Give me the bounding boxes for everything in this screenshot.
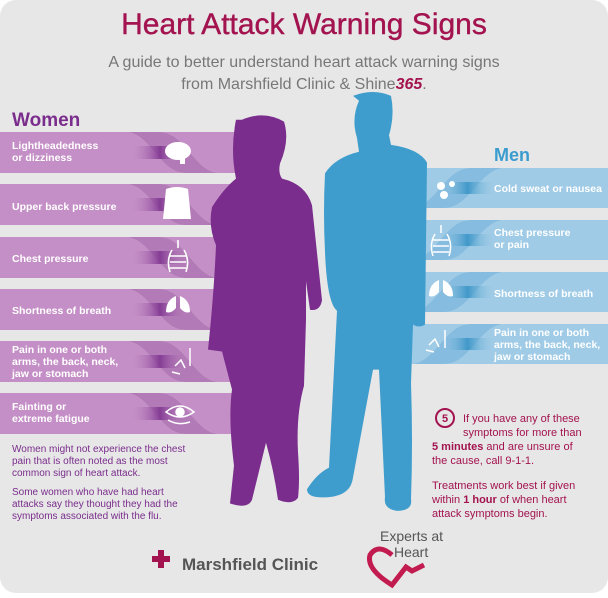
callout: 5 minutes: 5 minutes and are unsure of <box>432 441 574 453</box>
subtitle <box>108 54 500 93</box>
panel: men ribbons: Shortness of breath <box>494 288 593 300</box>
panel: women ribbons: or dizziness <box>12 152 72 164</box>
panel: men ribbons: arms, the back, neck, <box>494 339 600 351</box>
panel: women ribbons: Pain in one or both <box>12 344 107 356</box>
panel: women ribbons: Fainting or <box>12 401 66 413</box>
icons women <box>163 142 194 424</box>
panel: women ribbons: jaw or stomach <box>11 368 88 380</box>
panel: women ribbons: Upper back pressure <box>12 201 117 213</box>
callout: 5 minutes: within 1 hour of when heart <box>431 494 567 506</box>
subtitle: from Marshfield Clinic & Shine365. <box>181 76 427 93</box>
callout: 5 minutes: Treatments work best if given <box>432 480 575 492</box>
panel: women ribbons: extreme fatigue <box>12 413 90 425</box>
figure: man silhouette <box>307 92 427 511</box>
women note text: common sign of heart attack. <box>12 468 140 479</box>
icons men <box>426 181 455 352</box>
panel: men ribbons <box>390 168 608 364</box>
callout: 5 minutes <box>431 409 582 520</box>
heading: Men: Men <box>494 145 530 165</box>
women note text <box>12 444 185 522</box>
panel: women ribbons: Chest pressure <box>12 253 89 265</box>
logo: Marshfield Clinic: Marshfield Clinic <box>182 555 318 574</box>
panel: men ribbons: or pain <box>494 239 529 251</box>
panel: men ribbons: Chest pressure <box>494 227 571 239</box>
callout: 5 minutes: the cause, call 9-1-1. <box>432 455 534 467</box>
logo: Marshfield Clinic <box>152 550 318 574</box>
logo: Experts at Heart: Heart <box>394 544 428 560</box>
callout: 5 minutes: If you have any of these <box>463 413 580 425</box>
panel: men ribbons: Pain in one or both <box>494 327 589 339</box>
women note text: attacks say they thought they had the <box>12 499 178 510</box>
figure: woman silhouette <box>208 115 322 506</box>
panel: women ribbons: Lightheadedness <box>12 140 99 152</box>
callout: 5 minutes: attack symptoms begin. <box>432 508 548 520</box>
callout: 5 minutes: 5 <box>442 413 448 425</box>
panel: men ribbons: Cold sweat or nausea <box>494 183 602 195</box>
panel: men ribbons: jaw or stomach <box>493 351 570 363</box>
women note text: Some women who have had heart <box>12 487 164 498</box>
logo: Experts at Heart: Experts at <box>380 528 443 544</box>
panel: women ribbons: arms, the back, neck, <box>12 356 118 368</box>
panel: women ribbons: Shortness of breath <box>12 305 111 317</box>
callout: 5 minutes: symptoms for more than <box>463 427 582 439</box>
logo: Experts at Heart <box>369 528 443 585</box>
women note text: Women might not experience the chest <box>12 444 185 455</box>
subtitle: A guide to better understand heart attack warning signs <box>108 54 500 71</box>
women note text: symptoms associated with the flu. <box>12 511 162 522</box>
title: Heart Attack Warning Signs <box>121 8 487 41</box>
panel: women ribbons <box>0 132 245 434</box>
women note text: pain that is often noted as the most <box>12 456 168 467</box>
heading: Women: Women <box>12 110 80 131</box>
